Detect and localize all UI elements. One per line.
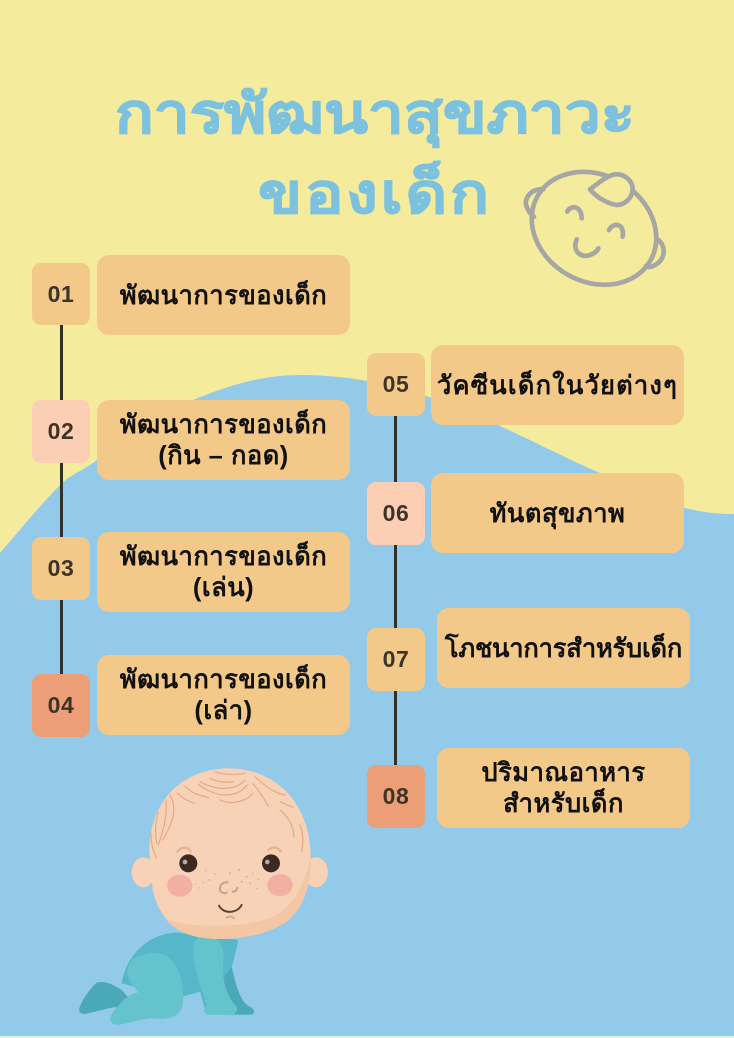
text: (กิน – กอด) (158, 442, 289, 470)
text: พัฒนาการของเด็ก (120, 282, 327, 310)
text: พัฒนาการของเด็ก (120, 666, 327, 694)
step 08 (367, 748, 690, 828)
text: 04 (48, 692, 74, 718)
text: 07 (383, 646, 409, 672)
text: 02 (48, 418, 74, 444)
title: ของเด็ก (258, 163, 492, 224)
text: 06 (383, 500, 409, 526)
text: ทันตสุขภาพ (490, 500, 625, 528)
step 03 (32, 532, 350, 612)
text: ปริมาณอาหาร (481, 759, 646, 787)
step 06 (367, 473, 684, 553)
bottom edge (0, 1036, 734, 1038)
text: 08 (383, 783, 409, 809)
text: พัฒนาการของเด็ก (120, 411, 327, 439)
step 04 (32, 655, 350, 737)
text: 01 (48, 280, 74, 306)
title: การพัฒนาสุขภาวะ (115, 83, 635, 145)
step 05 (367, 345, 684, 425)
title (115, 83, 635, 224)
text: (เล่น) (193, 574, 254, 602)
text: 03 (48, 555, 74, 581)
timeline connector lines (60, 325, 425, 1019)
step 01 (32, 255, 350, 335)
text: วัคซีนเด็กในวัยต่างๆ (437, 372, 678, 400)
text: พัฒนาการของเด็ก (120, 543, 327, 571)
step 02 (32, 400, 350, 480)
text: (เล่า) (194, 697, 253, 725)
text: โภชนาการสำหรับเด็ก (445, 634, 682, 662)
text: สำหรับเด็ก (503, 790, 624, 818)
text: 05 (383, 371, 409, 397)
step 07 (367, 608, 690, 691)
